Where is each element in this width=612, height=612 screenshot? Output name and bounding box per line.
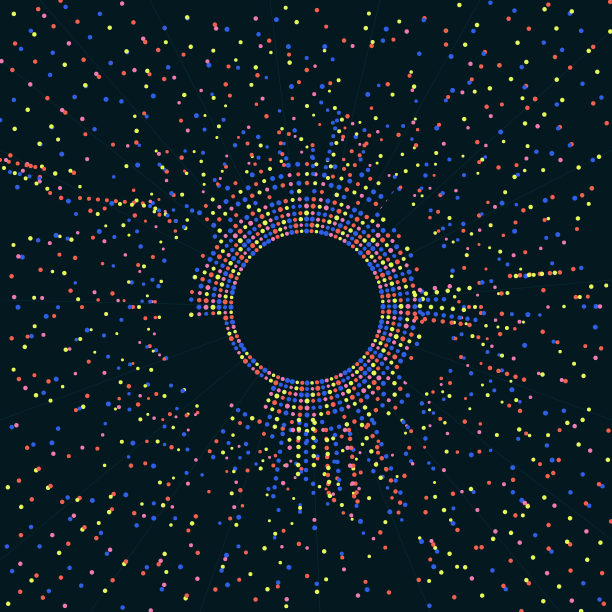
bottom bulge of ring <box>230 380 410 443</box>
corner dots: top right <box>418 0 612 194</box>
corner dots: bottom right <box>418 418 612 612</box>
top burst streaks <box>278 108 372 180</box>
central dark hole <box>234 234 380 380</box>
corner dots: top left <box>0 0 194 194</box>
outer layers of the dot ring <box>189 189 425 425</box>
dense dot ring around the hole <box>207 207 407 407</box>
corner dots: bottom left <box>0 418 194 612</box>
top bulge of ring <box>196 162 394 228</box>
bottom burst streaks <box>272 420 408 512</box>
right burst streaks <box>415 272 565 380</box>
left streaks <box>0 160 190 232</box>
